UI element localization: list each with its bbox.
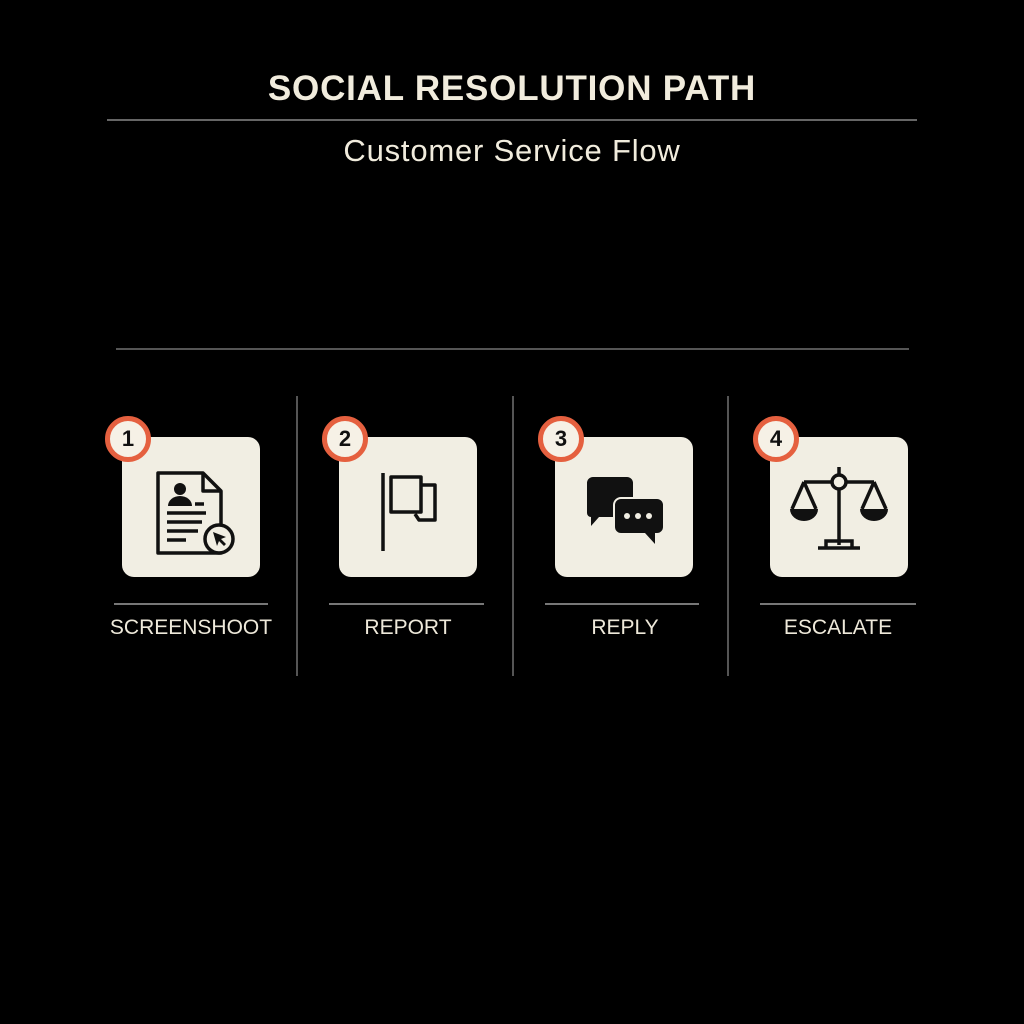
step 1: screenshoot — [105, 416, 272, 639]
badge 2 — [322, 416, 368, 462]
label: REPLY — [591, 616, 659, 639]
title: SOCIAL RESOLUTION PATH — [268, 69, 756, 108]
badge 2: 2 — [339, 426, 351, 451]
badge 1 — [105, 416, 151, 462]
step 2: report — [322, 416, 484, 639]
card icon: scales — [770, 437, 908, 577]
step 3: reply — [538, 416, 699, 639]
subtitle: Customer Service Flow — [343, 133, 681, 168]
card icon: flag — [339, 437, 477, 577]
step 4: escalate — [753, 416, 916, 639]
card icon: document with cursor — [122, 437, 260, 577]
badge 4: 4 — [770, 426, 782, 451]
badge 3: 3 — [555, 426, 567, 451]
label: ESCALATE — [784, 616, 892, 639]
badge 3 — [538, 416, 584, 462]
label: REPORT — [364, 616, 452, 639]
badge 1: 1 — [122, 426, 134, 451]
badge 4 — [753, 416, 799, 462]
label: SCREENSHOOT — [110, 616, 272, 639]
card icon: chat bubbles — [555, 437, 693, 577]
